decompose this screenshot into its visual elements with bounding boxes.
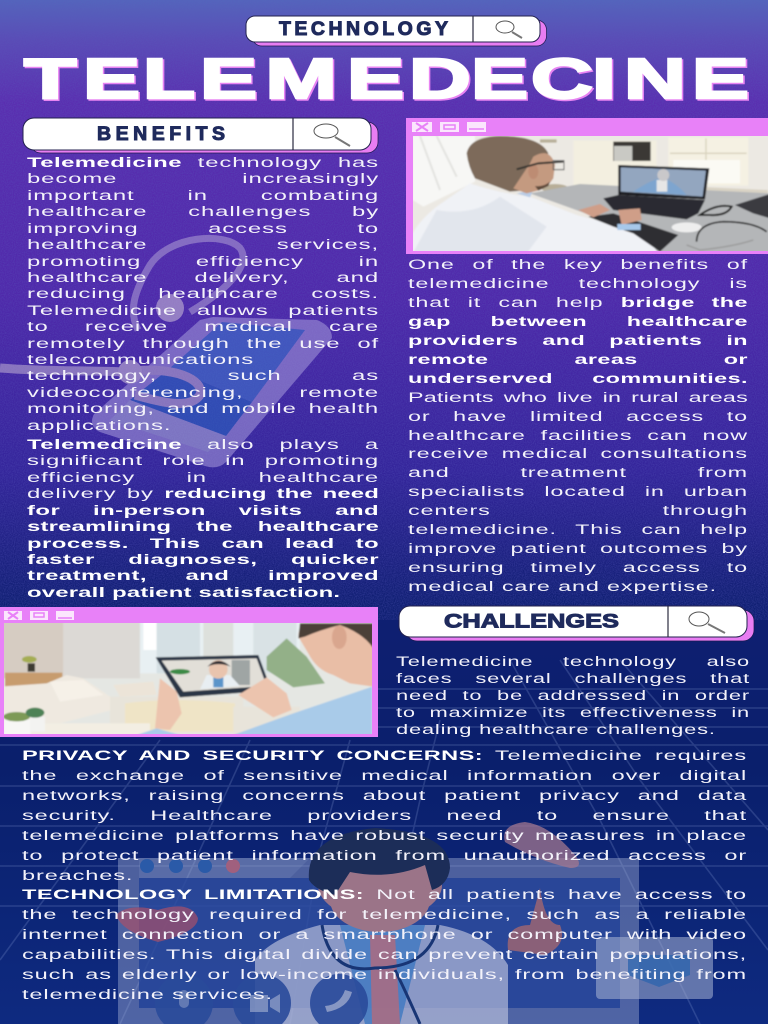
- pill: challenges: [399, 606, 754, 641]
- text: benefits left column: improving access to: [27, 220, 379, 236]
- pill: benefits: BENEFITS: [97, 123, 225, 145]
- text: benefits right column: Patients who live in rural areas: [408, 390, 748, 404]
- illustration: doctor on video call: [116, 822, 713, 1024]
- text: challenges details: breaches.: [22, 868, 133, 882]
- pill: challenges: CHALLENGES: [444, 610, 619, 632]
- text: benefits left column: efficiency in healthcare: [27, 470, 379, 484]
- text: benefits left column: significant role in promoting: [27, 453, 379, 468]
- text: benefits left column: remotely through the use of: [27, 336, 379, 350]
- text: benefits right column: healthcare facilities can now: [408, 428, 748, 442]
- text: challenges details: TECHNOLOGY LIMITATIONS: Not all patients have access to: [22, 886, 747, 902]
- text: benefits right column: medical care and expertise.: [408, 578, 717, 594]
- text: benefits left column: Telemedicine technology has: [27, 154, 379, 170]
- text: challenges intro: [396, 654, 750, 737]
- text: benefits right column: [408, 256, 748, 594]
- text: challenges details: telemedicine platforms have robust security measures in place: [22, 828, 747, 842]
- text: benefits left column: applications.: [27, 418, 171, 432]
- text: challenges details: the technology required for telemedicine, such as a reliable: [22, 906, 747, 922]
- text: benefits left column: delivery by reducing the need: [27, 486, 379, 501]
- text: benefits right column: specialists located in urban: [408, 484, 748, 498]
- text: challenges intro: to maximize its effectiveness in: [396, 704, 750, 720]
- text: benefits left column: reducing healthcare costs.: [27, 286, 379, 301]
- text: challenges details: capabilities. This digital divide can prevent certain populations,: [22, 946, 747, 962]
- pill: benefits: [23, 118, 378, 153]
- text: challenges details: internet connection or a smartphone or computer with video: [22, 926, 747, 942]
- text: challenges details: the exchange of sensitive medical information over digital: [22, 768, 747, 782]
- text: challenges details: security. Healthcare providers need to ensure that: [22, 808, 747, 822]
- text: benefits right column: ensuring timely access to: [408, 560, 748, 574]
- text: benefits right column: remote areas or: [408, 352, 748, 366]
- text: benefits left column: overall patient satisfaction.: [27, 584, 340, 600]
- text: benefits left column: promoting efficiency in: [27, 254, 379, 268]
- text: benefits right column: centers through: [408, 502, 748, 518]
- text: challenges details: such as elderly or low-income individuals, from benefiting from: [22, 966, 747, 982]
- text: benefits right column: telemedicine technology is: [408, 276, 748, 290]
- text: benefits right column: or have limited access to: [408, 408, 748, 424]
- text: challenges details: networks, raising concerns about patient privacy and data: [22, 788, 747, 802]
- text: challenges details: telemedicine services.: [22, 986, 273, 1002]
- text: benefits right column: improve patient outcomes by: [408, 540, 748, 556]
- text: benefits left column: Telemedicine allows patients: [27, 302, 379, 318]
- pill: technology: TECHNOLOGY: [279, 18, 448, 40]
- text: benefits left column: faster diagnoses, quicker: [27, 552, 379, 566]
- title: TELEMEDECINE: [24, 47, 749, 111]
- text: benefits left column: become increasingly: [27, 171, 379, 186]
- text: benefits left column: to receive medical care: [27, 319, 379, 334]
- window: tablet photo: [0, 607, 378, 737]
- text: benefits right column: and treatment from: [408, 464, 748, 480]
- window: doctor photo: [406, 118, 768, 254]
- text: challenges details: PRIVACY AND SECURITY CONCERNS: Telemedicine requires: [22, 748, 747, 762]
- text: challenges intro: faces several challenges that: [396, 670, 750, 686]
- text: benefits left column: process. This can lead to: [27, 536, 379, 550]
- text: benefits right column: One of the key benefits of: [408, 256, 748, 272]
- text: benefits left column: technology, such as: [27, 368, 379, 383]
- text: challenges details: [22, 748, 747, 1002]
- text: benefits right column: telemedicine. This can help: [408, 522, 748, 536]
- text: benefits left column: telecommunications: [27, 352, 254, 366]
- text: challenges details: to protect patient information from unauthorized access or: [22, 848, 747, 862]
- title: TELEMEDECINE: [26, 49, 750, 112]
- text: benefits right column: underserved communities.: [408, 370, 748, 386]
- pill: technology: [246, 16, 546, 46]
- text: challenges intro: Telemedicine technology also: [396, 654, 750, 668]
- text: benefits left column: [27, 154, 379, 600]
- text: challenges intro: need to be addressed in order: [396, 688, 750, 702]
- text: benefits left column: important in combating: [27, 188, 379, 202]
- text: benefits left column: videoconferencing, remote: [27, 384, 379, 400]
- text: benefits left column: streamlining the healthcare: [27, 519, 379, 534]
- text: benefits right column: providers and patients in: [408, 332, 748, 348]
- illustration: stethoscope and phone: [0, 238, 332, 467]
- text: benefits left column: Telemedicine also plays a: [27, 436, 379, 452]
- text: benefits left column: treatment, and improved: [27, 568, 379, 583]
- text: benefits left column: for in-person visits and: [27, 502, 379, 518]
- text: benefits left column: monitoring, and mobile health: [27, 401, 379, 416]
- text: benefits left column: healthcare delivery, and: [27, 270, 379, 285]
- text: benefits left column: healthcare challenges by: [27, 204, 379, 219]
- text: challenges intro: dealing healthcare challenges.: [396, 722, 716, 736]
- text: benefits right column: receive medical consultations: [408, 446, 748, 460]
- text: benefits right column: that it can help bridge the: [408, 294, 748, 310]
- text: benefits left column: healthcare services,: [27, 237, 379, 252]
- text: benefits right column: gap between healthcare: [408, 314, 748, 328]
